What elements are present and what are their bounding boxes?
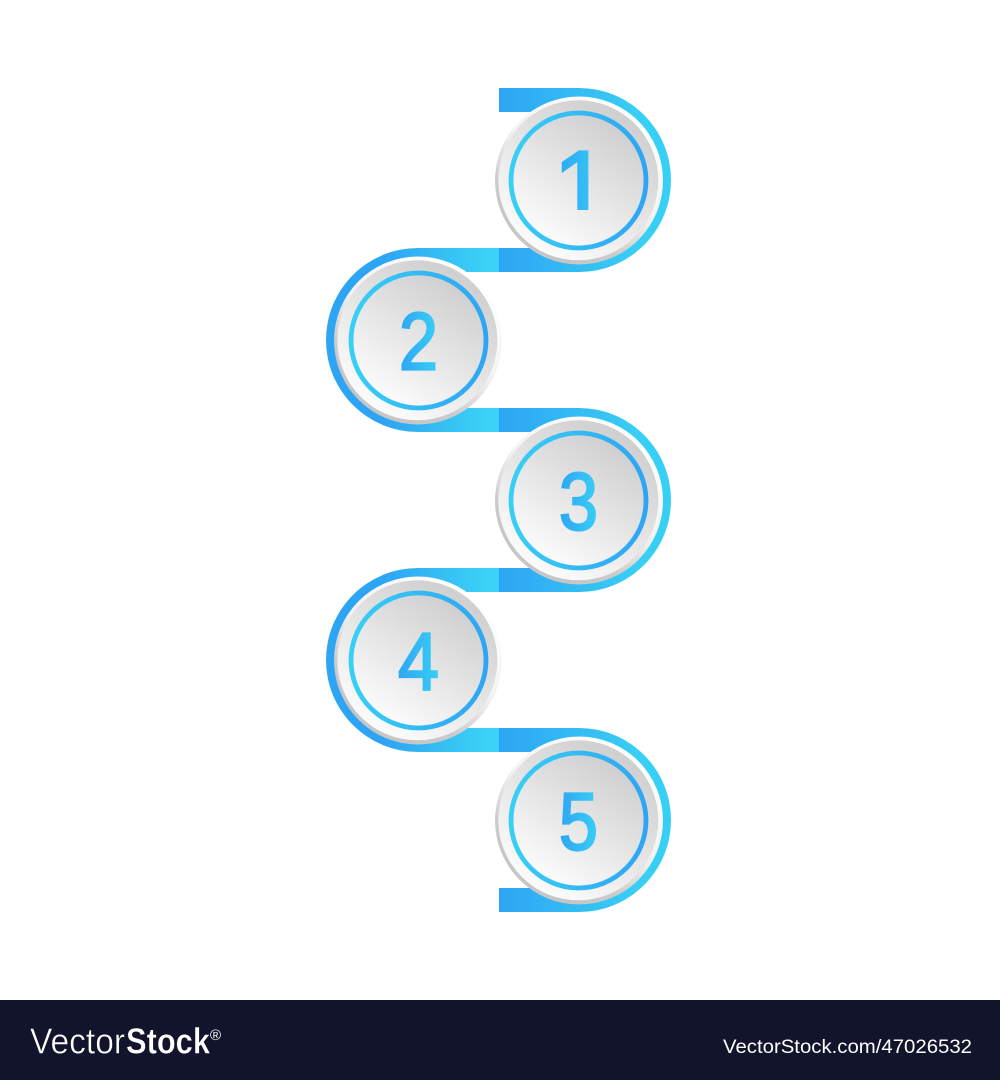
number 5: 5 [559,777,598,868]
step 5 badge [495,736,663,904]
footer bar [0,1000,1000,1080]
footer image id: VectorStock.com/47026532 [723,1037,972,1058]
number 4: 4 [398,615,439,707]
number 2: 2 [399,297,438,388]
footer logo [30,1020,221,1062]
number 3: 3 [559,457,598,548]
step 3 badge [495,416,663,584]
step 2 badge [334,256,502,424]
ribbon curve: step 1 [499,88,671,272]
footer logo: Stock [126,1020,211,1062]
flowing ribbon connecting the steps [326,88,671,912]
footer logo: ® [210,1027,221,1044]
footer logo: Vector [30,1020,125,1062]
ribbon curve: step 3 [499,408,671,592]
ribbon curve: step 5 [499,728,671,912]
ribbon curve: step 2 [326,248,499,432]
step 4 badge [334,576,502,744]
ribbon curve: step 4 [326,568,499,752]
step 1 badge [495,96,663,264]
number 1: 1 [553,130,609,242]
